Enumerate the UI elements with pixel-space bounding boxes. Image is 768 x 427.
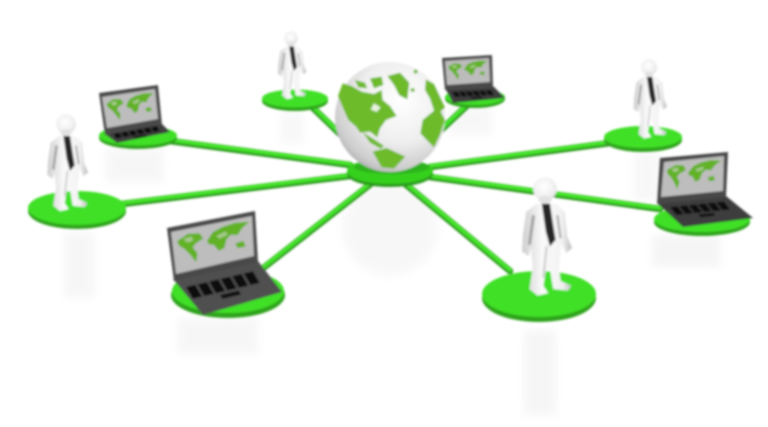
node: laptop right	[654, 152, 753, 236]
node: laptop left	[99, 85, 177, 149]
node: person right	[604, 59, 682, 152]
node: person top	[262, 31, 328, 111]
floor reflections	[64, 105, 720, 415]
node: person front	[482, 177, 596, 322]
central hub	[347, 158, 433, 187]
node: laptop top right	[442, 55, 505, 108]
node: laptop front	[167, 211, 285, 318]
connector lines	[122, 97, 660, 271]
globe	[335, 62, 445, 172]
node: person left	[28, 114, 126, 229]
